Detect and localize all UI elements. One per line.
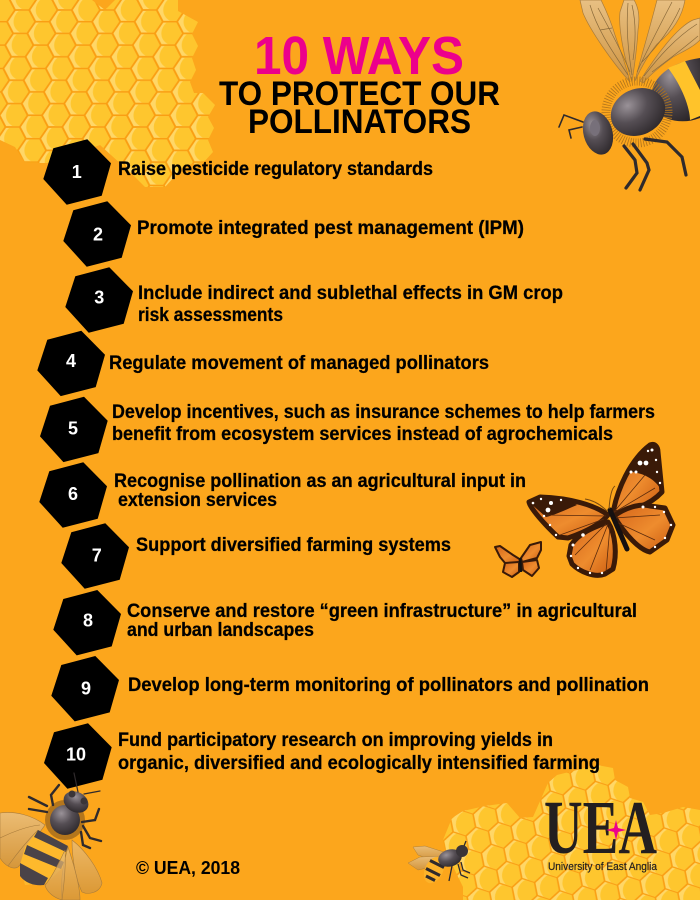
item 5: Develop incentives, such as insurance schemes to help farmers xyxy=(112,402,655,423)
item 3: risk assessments xyxy=(138,305,283,326)
title xyxy=(219,26,500,141)
bee hair xyxy=(45,800,85,840)
item 4: 4 xyxy=(66,351,76,371)
bee: small bottom xyxy=(408,841,470,887)
bee legs xyxy=(449,841,470,881)
title line: pollinators: POLLINATORS xyxy=(248,103,471,141)
item 3 xyxy=(65,267,563,333)
butterfly veins xyxy=(545,475,660,572)
bee wings xyxy=(580,0,700,83)
list of ten ways xyxy=(37,139,655,789)
logo pink star xyxy=(606,820,626,840)
logo letters: UEA xyxy=(544,786,657,870)
bee right wings xyxy=(45,840,102,900)
item 9: 9 xyxy=(81,678,91,698)
butterfly body xyxy=(610,510,627,549)
bee thorax xyxy=(436,847,464,869)
item 6: extension services xyxy=(118,490,277,511)
bee thorax xyxy=(603,79,673,145)
butterfly dark wing tips xyxy=(529,445,661,517)
honeycomb: top left xyxy=(0,0,216,188)
butterfly: large xyxy=(529,444,673,575)
item 7 xyxy=(61,523,451,589)
bee abdomen stripes xyxy=(20,830,68,885)
item 8: 8 xyxy=(83,610,93,630)
bee wings xyxy=(408,846,447,870)
item 5: 5 xyxy=(68,418,78,438)
item 2 xyxy=(63,201,524,267)
item 1: 1 xyxy=(72,162,82,182)
bee: bottom left xyxy=(0,773,102,900)
item 8: Conserve and restore “green infrastructure” in agricultural xyxy=(127,601,637,622)
butterfly antennae xyxy=(585,486,615,511)
butterfly: small xyxy=(495,542,541,577)
bee head xyxy=(578,108,618,158)
bee hair xyxy=(606,81,668,143)
bee yellow band xyxy=(668,61,700,120)
item 10: Fund participatory research on improving yields in xyxy=(118,730,553,751)
item 6 xyxy=(39,462,526,528)
bee legs xyxy=(559,115,686,190)
item 9: Develop long-term monitoring of pollinators and pollination xyxy=(128,675,649,696)
item 5 xyxy=(40,397,655,462)
item 1 xyxy=(43,139,433,205)
item 10: organic, diversified and ecologically intensified farming xyxy=(118,753,600,774)
item 6: 6 xyxy=(68,484,78,504)
bee head xyxy=(456,845,468,857)
item 6: Recognise pollination as an agricultural input in xyxy=(114,471,526,492)
logo caption: University of East Anglia xyxy=(548,861,658,873)
bee eyes xyxy=(68,790,88,804)
bee head xyxy=(60,787,92,817)
item 4 xyxy=(37,331,489,396)
item 2: 2 xyxy=(93,224,103,244)
item 7: Support diversified farming systems xyxy=(136,535,451,556)
bee legs and antennae xyxy=(29,773,101,848)
honeycomb: bottom right xyxy=(440,764,700,900)
bee eye xyxy=(590,120,600,136)
butterfly wings xyxy=(529,444,673,575)
item 10: 10 xyxy=(66,744,86,764)
item 7: 7 xyxy=(92,546,102,566)
title line: 10 ways: 10 WAYS xyxy=(254,26,464,86)
bee abdomen xyxy=(20,830,68,885)
bee abdomen stripes xyxy=(426,860,444,880)
item 1: Raise pesticide regulatory standards xyxy=(118,159,433,180)
item 3: Include indirect and sublethal effects in GM crop xyxy=(138,283,563,304)
title line: to protect our: TO PROTECT OUR xyxy=(219,75,500,113)
item 8: and urban landscapes xyxy=(127,620,314,641)
bee abdomen xyxy=(420,853,448,887)
item 2: Promote integrated pest management (IPM) xyxy=(137,218,524,239)
item 9 xyxy=(51,656,649,721)
butterfly white spots xyxy=(532,448,672,574)
bee: top right xyxy=(559,0,700,190)
item 8 xyxy=(53,590,637,655)
item 4: Regulate movement of managed pollinators xyxy=(109,353,489,374)
item 3: 3 xyxy=(94,288,104,308)
bee abdomen xyxy=(652,58,700,121)
bee thorax xyxy=(50,805,80,835)
item 10 xyxy=(44,723,600,789)
bee wing veins xyxy=(590,2,698,76)
copyright: © UEA, 2018 xyxy=(136,858,240,878)
UEA logo xyxy=(544,786,658,873)
bee left wing xyxy=(0,812,45,868)
item 5: benefit from ecosystem services instead of agrochemicals xyxy=(112,424,613,445)
